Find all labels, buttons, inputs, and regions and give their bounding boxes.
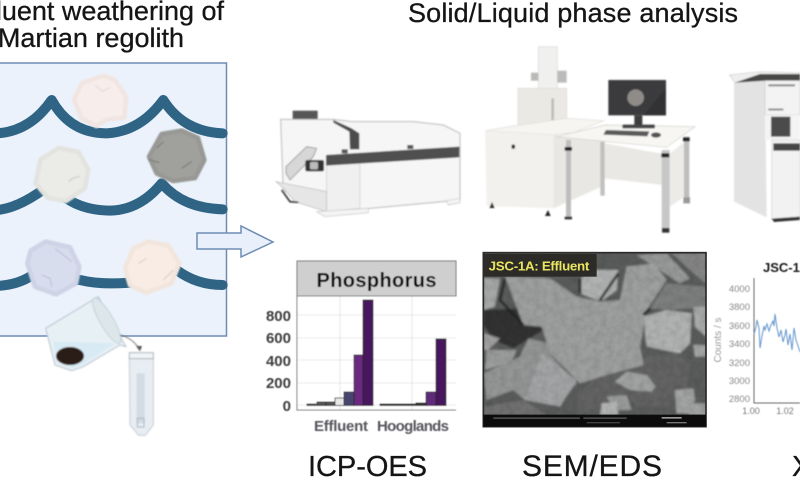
y axis labels: 800 — [266, 308, 291, 325]
x axis labels — [742, 406, 794, 416]
keyboard and mouse — [603, 130, 661, 138]
chart: XRD spectrum — [713, 260, 800, 416]
x axis labels: 1.00 — [742, 406, 760, 416]
monitor — [608, 80, 666, 128]
desk legs — [565, 137, 690, 233]
y axis labels: 3400 — [729, 339, 750, 350]
y axis labels: 4000 — [729, 284, 750, 295]
rock: dark grey — [148, 131, 204, 181]
y axis labels: 200 — [266, 375, 291, 392]
instrument: SEM with desk and monitor — [485, 47, 695, 233]
y axis labels: 400 — [266, 353, 291, 370]
SEM info bar — [483, 415, 706, 427]
effluent bars — [307, 300, 373, 406]
y axis labels — [266, 308, 291, 415]
centrifuge tube — [129, 353, 153, 435]
title: effluent weathering — [0, 0, 224, 53]
y axis title: Counts / s — [713, 317, 724, 363]
x axis labels — [314, 418, 449, 435]
title: effluent weathering: Martian regolith — [0, 23, 184, 53]
y axis labels: 600 — [266, 330, 291, 347]
x axis labels: Effluent — [314, 418, 368, 435]
plot area — [297, 296, 456, 410]
rock: light grey — [36, 148, 88, 201]
y axis labels — [729, 284, 750, 405]
chart header: Phosphorus — [316, 270, 436, 292]
SEM image label — [483, 254, 597, 277]
y axis labels: 3000 — [729, 376, 750, 387]
y axis labels: 3800 — [729, 302, 750, 313]
desk top — [557, 125, 695, 147]
instrument: ICP-OES spectrometer — [276, 111, 460, 217]
arrow — [197, 226, 273, 257]
rock: lavender — [27, 242, 79, 294]
axes — [754, 278, 800, 403]
y axis labels: 0 — [283, 398, 291, 415]
spectrum line — [754, 314, 800, 352]
x axis labels: 1.02 — [776, 406, 794, 416]
rock: pink — [74, 76, 126, 126]
rock: peach — [125, 242, 179, 293]
desk panels — [604, 143, 663, 185]
bar chart: phosphorus — [266, 261, 456, 435]
hooglands bars — [380, 339, 446, 406]
icon: beaker pouring into tube — [46, 295, 153, 435]
water waves — [0, 100, 223, 286]
SEM image label: JSC-1A: Effluent — [489, 259, 590, 274]
x axis labels: Hooglands — [377, 418, 449, 435]
y axis labels: 3600 — [729, 321, 750, 332]
instrument: XRD cabinet — [729, 72, 800, 222]
beaker — [46, 295, 142, 371]
micrograph: SEM image — [480, 250, 710, 430]
panel: weathering vessel — [0, 63, 226, 336]
SEM column — [518, 47, 567, 128]
y axis labels: 3200 — [729, 358, 750, 369]
cabinet — [485, 118, 604, 216]
y axis labels: 2800 — [729, 394, 750, 405]
chart header — [297, 261, 456, 296]
